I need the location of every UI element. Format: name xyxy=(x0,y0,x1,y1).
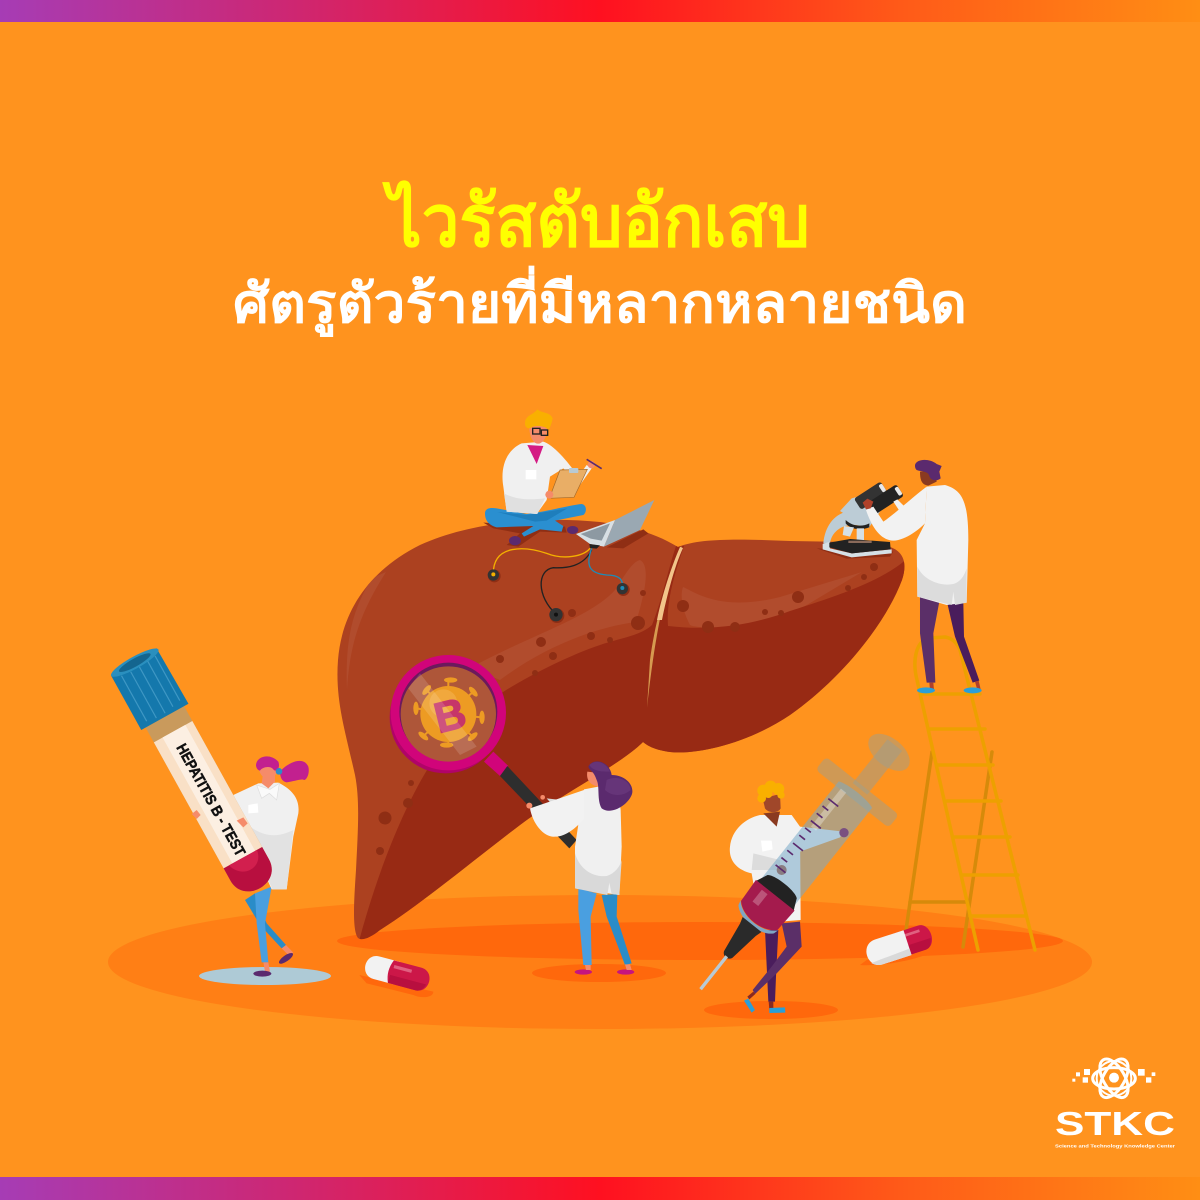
wires and electrodes xyxy=(493,548,623,614)
clipboard and pen xyxy=(545,459,602,499)
head xyxy=(920,470,937,486)
virus B xyxy=(413,677,485,748)
liver spots xyxy=(376,563,878,855)
blood test tube: HEPATITIS B - TEST xyxy=(172,741,248,859)
top gradient bar xyxy=(0,0,1200,22)
title: ศัตรูตัวร้ายที่มีหลากหลายชนิด xyxy=(233,265,967,337)
STKC logo: STKC xyxy=(1055,1106,1175,1143)
liver highlights xyxy=(347,560,862,690)
liver dark lobes xyxy=(360,546,904,940)
capsule left xyxy=(359,954,433,997)
head xyxy=(529,423,547,444)
coat xyxy=(917,485,968,605)
legs xyxy=(485,504,586,537)
bottom gradient bar xyxy=(0,1177,1200,1200)
laptop xyxy=(576,500,654,549)
blood test tube xyxy=(108,644,283,901)
syringe xyxy=(664,712,934,1018)
title xyxy=(233,179,967,337)
sitting shadow xyxy=(483,523,648,548)
ground shadows xyxy=(108,895,1092,1029)
magnifying glass xyxy=(390,655,634,975)
STKC logo: Science and Technology Knowledge Center xyxy=(1055,1143,1175,1149)
microscope xyxy=(817,481,904,559)
legs xyxy=(920,597,939,683)
title: ไวรัสตับอักเสบ xyxy=(381,179,810,262)
coat xyxy=(502,442,592,514)
liver xyxy=(337,520,920,960)
microscope scientist xyxy=(817,460,982,693)
STKC logo xyxy=(1055,1055,1175,1149)
capsule right xyxy=(860,923,936,968)
scientist on liver with laptop xyxy=(483,409,654,623)
scientist with syringe xyxy=(664,712,934,1018)
virus B: B xyxy=(429,689,471,743)
ladder xyxy=(906,637,1035,950)
scientist with magnifier xyxy=(526,761,634,975)
scientist with blood tube xyxy=(108,644,433,997)
scientist body xyxy=(730,781,843,1013)
liver ligament xyxy=(647,546,682,708)
